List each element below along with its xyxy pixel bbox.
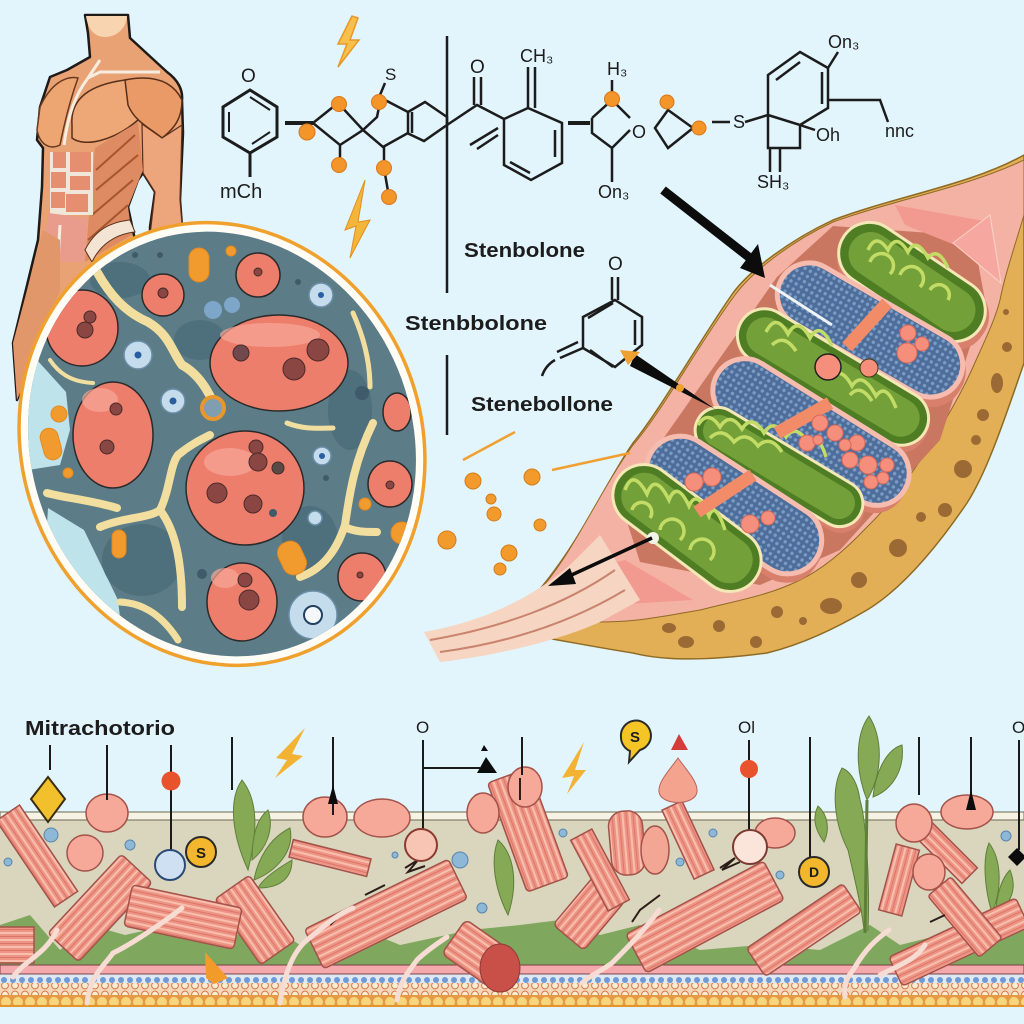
circle frame	[0, 165, 487, 723]
left deltoid	[37, 77, 78, 147]
chemical structure: small ketone ring: O	[608, 254, 623, 275]
chemical structure: left ring with labels: O	[241, 66, 256, 87]
orange spheres	[685, 325, 929, 533]
chemical structure: middle ring	[447, 46, 562, 180]
lower body strip	[13, 230, 60, 400]
mitochondrion green 3	[684, 399, 875, 541]
marker: red ball right	[740, 760, 758, 778]
marker: S badge top	[621, 721, 651, 762]
orange streak lines	[463, 432, 630, 470]
divider line lower	[446, 355, 448, 435]
arrow: to mitochondria top	[663, 190, 832, 325]
marker: D badge	[799, 857, 829, 887]
neck skin	[86, 16, 127, 37]
lower abdomen	[42, 213, 88, 262]
round blobs	[67, 767, 993, 890]
circle contents	[28, 232, 416, 656]
chemical structure: right chain with orange atoms	[568, 59, 706, 202]
chemical structure: right chain with orange atoms: On₃	[598, 182, 629, 202]
chemical structure: right ring with labels: Oh	[816, 125, 840, 145]
fascia lines	[58, 60, 160, 262]
pink inner layer	[540, 160, 1024, 622]
pink cells	[46, 253, 412, 641]
obliques	[85, 122, 143, 262]
green foliage	[0, 915, 1024, 966]
label: Stenebollone lower: Stenebollone	[471, 394, 613, 416]
green cristae	[625, 241, 949, 560]
large sphere	[815, 354, 841, 380]
chemical structure: left ring with labels: mCh	[220, 181, 262, 203]
chemical structure: right ring with labels: On₃	[828, 32, 859, 52]
yellow outer sheath	[500, 155, 1024, 659]
tendon strands	[424, 535, 640, 662]
plant stem	[865, 800, 867, 933]
marker: blue circle	[155, 850, 185, 880]
mitochondrion green 1	[823, 210, 1002, 362]
chemical structure: small ketone ring	[542, 254, 642, 376]
released orange molecules	[438, 469, 546, 575]
arrow: to ketone ring	[620, 350, 715, 409]
marker: pale bulbs	[733, 830, 767, 864]
leader lines	[50, 737, 1019, 860]
tissue background	[28, 232, 416, 656]
chemical structure: right chain with orange atoms: H₃	[607, 59, 627, 79]
marker: S badge	[186, 837, 216, 867]
leader lines and markers: O	[416, 718, 429, 737]
chemical structure: central chain with orange atoms	[285, 65, 447, 204]
label: Stenbolone top: Stenbolone	[464, 240, 585, 262]
chemical structure: middle ring: O	[470, 57, 485, 78]
abdominals	[50, 152, 93, 215]
muscle fibres	[0, 768, 1024, 991]
icon: lightning in strip	[205, 952, 228, 984]
mitochondrion blue 2	[697, 347, 923, 525]
leader lines and markers: S	[196, 845, 206, 862]
chemical structure: right ring with labels: S	[733, 112, 745, 132]
blue tissue patches	[28, 361, 120, 616]
lower-left stripes triangle	[600, 560, 693, 605]
dark interior	[620, 226, 985, 585]
right pectoral	[72, 80, 138, 142]
leader lines and markers: Ol	[738, 718, 755, 737]
leader lines and markers: D	[809, 864, 819, 880]
darker lobes	[90, 262, 372, 596]
mitochondrion blue 1	[762, 251, 980, 419]
cell highlights	[82, 323, 320, 588]
illustration: muscular torso	[13, 15, 183, 400]
membrane band	[0, 965, 1024, 974]
mitochondrion green 2	[724, 299, 941, 463]
orange ring	[202, 397, 224, 419]
plants	[233, 716, 1013, 930]
torso silhouette	[13, 15, 183, 400]
marker: red ball	[162, 772, 180, 790]
icon: lightning bolt top	[338, 16, 359, 67]
vesicles	[4, 828, 1011, 913]
right arm	[142, 124, 183, 235]
chemical structure: right chain with orange atoms: O	[632, 122, 646, 142]
leader lines and markers: S	[630, 729, 640, 746]
strip background	[0, 820, 1024, 966]
chemical structure: middle ring: CH₃	[520, 46, 553, 66]
membranes yellow	[47, 272, 377, 640]
orange capsules	[38, 246, 413, 578]
label: Mitrachotorio: Mitrachotorio	[25, 718, 175, 740]
panel: bottom damaged muscle strip	[0, 716, 1024, 1007]
chemical structure: right ring with labels	[712, 32, 914, 192]
blue vesicles	[124, 283, 337, 639]
right deltoid	[125, 78, 182, 138]
divider line upper	[446, 36, 448, 293]
right triangle muscle	[953, 215, 1001, 283]
cell nuclei	[77, 268, 394, 610]
chemical structure: right ring with labels: SH₃	[757, 172, 789, 192]
panel: magnified cell circle	[17, 220, 427, 668]
panel: muscle cross-section with mitochondria	[424, 155, 1024, 662]
icon: lightning bottom 1	[275, 728, 305, 778]
arrowheads	[328, 745, 1024, 866]
yellow sheath spots	[662, 309, 1012, 648]
strip top band	[0, 812, 1024, 820]
icon: lightning bolt middle	[345, 180, 370, 258]
label: Stenbbolone middle: Stenbbolone	[405, 313, 547, 335]
cut fibre disc	[480, 944, 520, 992]
icon: lightning bottom 2	[562, 742, 586, 794]
fibre cracks	[330, 778, 945, 925]
nerve branches	[13, 908, 925, 1003]
marker: yellow diamond	[31, 777, 65, 822]
chemical structure: central chain with orange atoms: S	[385, 65, 396, 84]
marker: pink drop with arrow	[659, 758, 697, 802]
chemical structure: left ring with labels	[220, 66, 277, 203]
mitochondrion green 4	[600, 452, 774, 604]
chemical structure: right ring with labels: nnc	[885, 121, 914, 141]
leader lines and markers	[31, 718, 1024, 887]
cross bars in blue mitochondria	[697, 303, 887, 512]
cell rows	[0, 975, 1024, 1007]
mitochondrion blue 3	[629, 423, 838, 596]
hip strip	[85, 220, 135, 262]
arrow: to tendon	[548, 532, 659, 586]
top stripes	[895, 205, 990, 245]
